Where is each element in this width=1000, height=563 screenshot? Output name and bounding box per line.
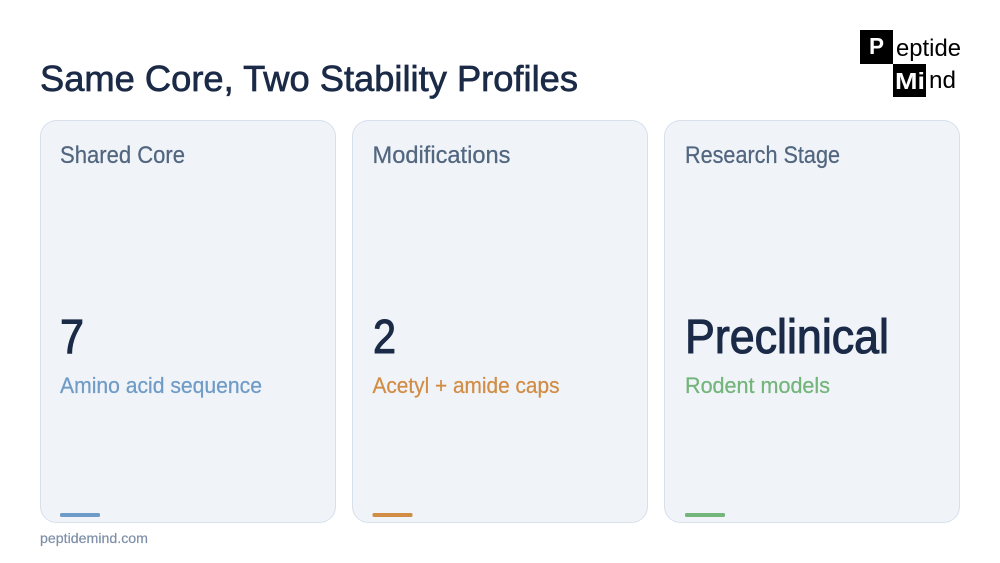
accent bar: blue xyxy=(60,513,100,517)
panel: shared core xyxy=(40,120,336,522)
panel: research stage xyxy=(664,120,960,522)
title: Same Core, Two Stability Profiles xyxy=(40,58,578,99)
accent bar: orange xyxy=(372,513,412,517)
panel: modifications xyxy=(352,120,648,522)
stat value: 2: 2 xyxy=(373,311,396,364)
logo: Peptide Mind: eptide xyxy=(896,35,961,62)
panel heading: shared core: Shared Core xyxy=(60,142,185,169)
panel heading: modifications: Modifications xyxy=(372,142,510,169)
stat value: 7: 7 xyxy=(60,311,84,364)
panel heading: research stage: Research Stage xyxy=(685,142,840,169)
logo: Peptide Mind: Mi xyxy=(895,68,925,94)
accent bar: green xyxy=(685,513,725,517)
stat label: rodent models: Rodent models xyxy=(685,373,830,398)
logo: Peptide Mind: P xyxy=(869,33,884,59)
footer url: peptidemind.com xyxy=(40,530,148,546)
stat label: acetyl + amide caps: Acetyl + amide caps xyxy=(372,373,560,398)
stat label: amino acid sequence: Amino acid sequence xyxy=(60,373,262,398)
logo: Peptide Mind xyxy=(860,30,961,97)
logo: Peptide Mind: nd xyxy=(929,67,956,94)
stat value: preclinical: Preclinical xyxy=(685,311,889,364)
